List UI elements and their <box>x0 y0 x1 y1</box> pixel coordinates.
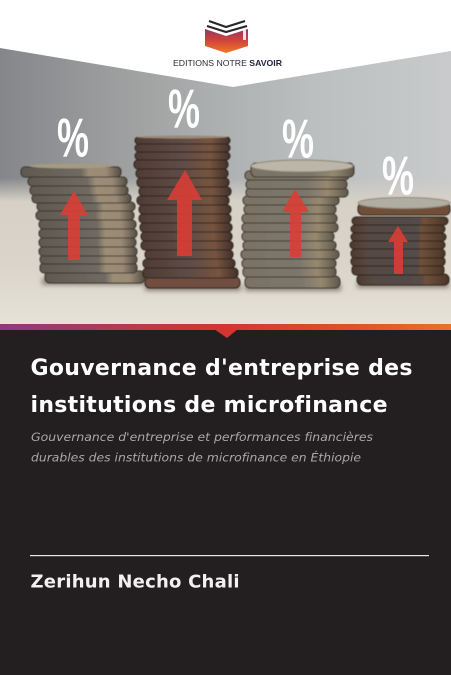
arrow: stack 2 <box>167 170 202 256</box>
coin stack 1 <box>21 164 145 283</box>
colour bar <box>0 324 451 330</box>
coin stack 2 <box>134 136 240 288</box>
coin stack 3 <box>241 160 354 288</box>
author: Zerihun Necho Chali <box>30 572 240 592</box>
icon: open book <box>205 21 248 53</box>
arrow: stack 4 <box>388 226 408 274</box>
publisher logo <box>173 21 282 68</box>
percent sign 1: % <box>57 107 89 168</box>
percent sign 2: % <box>168 78 200 139</box>
subtitle: Gouvernance d'entreprise et performances financières <box>31 430 373 444</box>
red notch <box>214 329 238 338</box>
photo: coin stacks with percent signs <box>0 40 451 325</box>
title: institutions de microfinance <box>30 393 388 418</box>
photo background: wall and table <box>0 40 451 325</box>
percent sign 4: % <box>382 145 414 206</box>
percent sign 3: % <box>282 108 314 169</box>
title: Gouvernance d'entreprise des <box>30 356 412 381</box>
coin shadows <box>42 278 449 291</box>
publisher name: EDITIONS NOTRE SAVOIR <box>173 58 282 68</box>
arrow: stack 3 <box>282 189 309 257</box>
arrow: stack 1 <box>60 191 88 260</box>
subtitle: durables des institutions de microfinance en Éthiopie <box>31 450 361 464</box>
divider line <box>30 555 429 556</box>
white header band <box>0 0 451 87</box>
coin stack 4 <box>350 198 450 285</box>
